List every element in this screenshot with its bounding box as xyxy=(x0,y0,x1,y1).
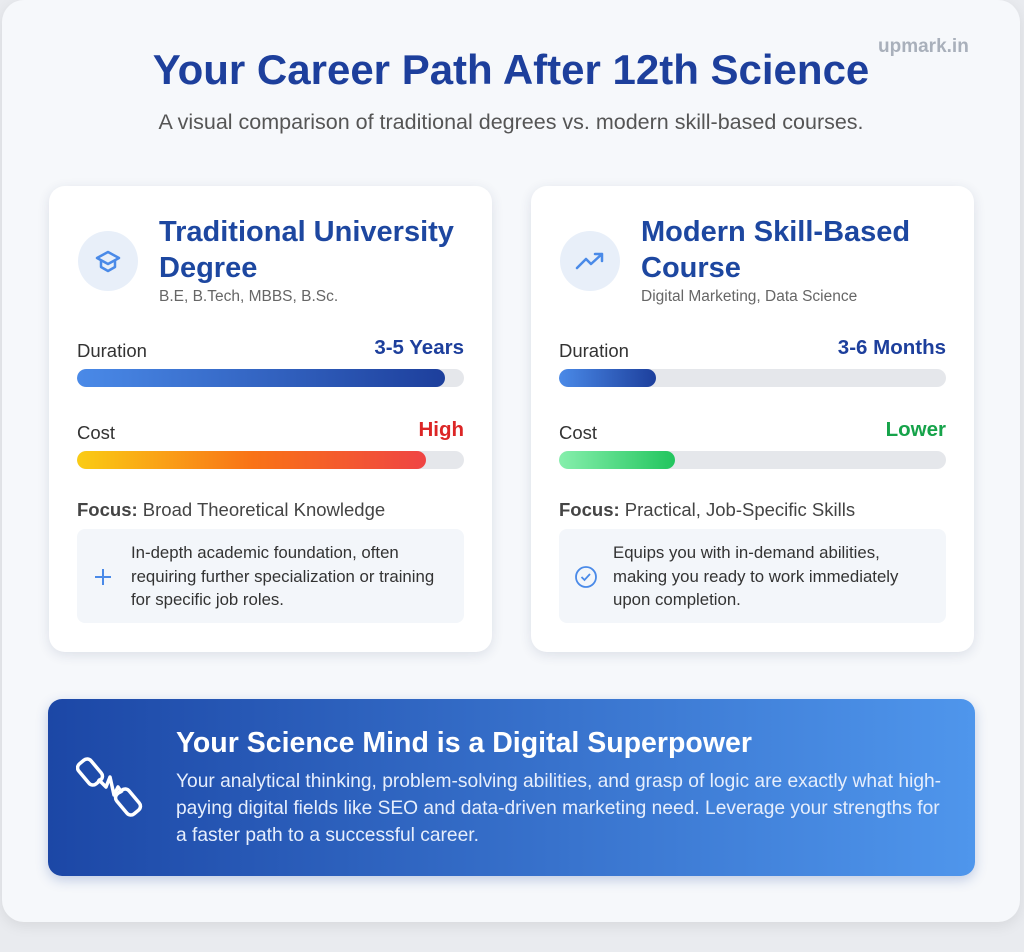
focus: Focus: Practical, Job-Specific Skills xyxy=(559,499,855,520)
panel: traditional xyxy=(49,186,492,652)
examples: B.E, B.Tech, MBBS, B.Sc. xyxy=(159,288,338,305)
note box: upon completion. xyxy=(613,590,741,609)
duration value: 3-5 Years xyxy=(374,336,464,359)
cost value: High xyxy=(418,418,464,441)
icon: dna/link xyxy=(76,757,142,817)
heading xyxy=(641,216,910,284)
heading: Modern Skill-Based xyxy=(641,216,910,248)
banner text xyxy=(176,771,941,846)
banner text: Your analytical thinking, problem-solving abilities, and grasp of logic are exactly what high- xyxy=(176,771,941,792)
heading: Traditional University xyxy=(159,216,454,248)
note box xyxy=(559,529,946,623)
panel: modern xyxy=(531,186,974,652)
cost label: Cost xyxy=(77,422,115,443)
duration bar xyxy=(559,369,946,387)
note box: making you ready to work immediately xyxy=(613,566,898,586)
banner text: paying digital fields like SEO and data-driven marketing need. Leverage your strengths for xyxy=(176,798,940,819)
banner xyxy=(48,699,975,876)
duration label: Duration xyxy=(77,340,147,361)
icon: trend arrow xyxy=(560,231,620,291)
duration label: Duration xyxy=(559,340,629,361)
banner text: a faster path to a successful career. xyxy=(176,825,479,846)
duration value: 3-6 Months xyxy=(838,336,946,359)
cost label: Cost xyxy=(559,422,597,443)
subtitle: A visual comparison of traditional degrees vs. modern skill-based courses. xyxy=(158,110,864,134)
cost bar xyxy=(77,451,464,469)
examples: Digital Marketing, Data Science xyxy=(641,288,857,305)
focus: Focus: Broad Theoretical Knowledge xyxy=(77,499,385,520)
watermark: upmark.in xyxy=(878,36,969,57)
duration bar xyxy=(77,369,464,387)
heading: Degree xyxy=(159,252,257,284)
note box: for specific job roles. xyxy=(131,590,284,609)
cost bar xyxy=(559,451,946,469)
note box: In-depth academic foundation, often xyxy=(131,543,399,562)
heading xyxy=(159,216,454,284)
note box: requiring further specialization or training xyxy=(131,566,434,586)
note box xyxy=(77,529,464,623)
title: Your Career Path After 12th Science xyxy=(153,46,869,93)
cost value: Lower xyxy=(886,418,946,441)
note box: Equips you with in-demand abilities, xyxy=(613,543,880,562)
heading: Course xyxy=(641,252,741,284)
banner heading: Your Science Mind is a Digital Superpower xyxy=(176,727,752,759)
icon: graduation cap xyxy=(78,231,138,291)
